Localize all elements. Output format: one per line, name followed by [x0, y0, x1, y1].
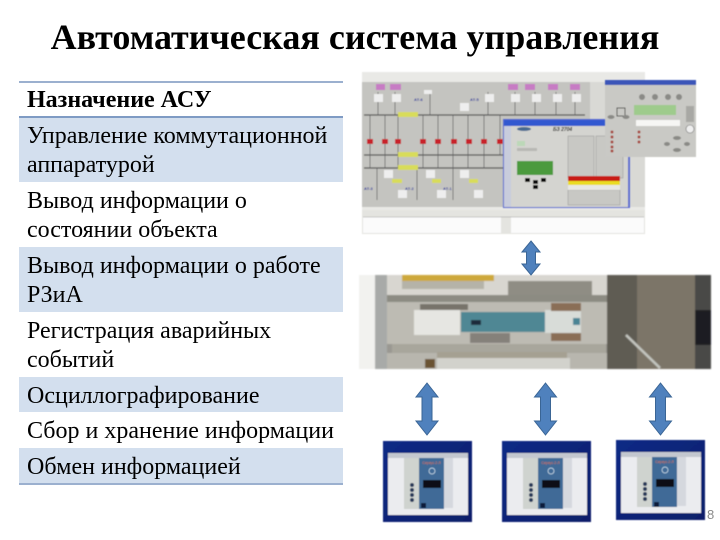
- row: data exchange: [19, 448, 343, 485]
- AT labels: [364, 97, 479, 191]
- yellow labels: [392, 112, 478, 183]
- panel: table of ASU purposes: [19, 81, 343, 485]
- table header: Назначение АСУ: [27, 87, 211, 113]
- AT labels: АТ-6: [414, 97, 423, 102]
- event log panes: [362, 210, 645, 234]
- row: event logging: событий: [27, 347, 114, 373]
- photo: relay cabinet: [359, 275, 711, 369]
- table header: [19, 81, 343, 118]
- photo: relay terminal 1: [383, 441, 472, 522]
- red breakers: [367, 139, 503, 144]
- row: event logging: [27, 318, 271, 373]
- dialog: BZ 2704 device window: БЗ 2704: [553, 127, 572, 133]
- pink feeder labels: [376, 84, 580, 90]
- row: switchgear control: аппаратурой: [27, 152, 155, 178]
- row: relay protection output: Вывод информации о работе: [27, 253, 321, 279]
- row: data storage: Сбор и хранение информации: [27, 418, 334, 444]
- dialog: control window: [605, 80, 696, 157]
- photo: relay terminal 2: [502, 441, 591, 522]
- top terminals: [402, 275, 494, 281]
- row: object state output: [27, 188, 247, 243]
- row: event logging: Регистрация аварийных: [27, 318, 271, 344]
- row: data exchange: Обмен информацией: [27, 454, 241, 480]
- photo: relay terminal 3: Сириус-2-Л: [655, 460, 674, 464]
- modules: [414, 310, 460, 335]
- row: relay protection output: РЗиА: [27, 282, 83, 308]
- photo: relay terminal 3: [616, 440, 705, 520]
- AT labels: АТ-3: [364, 186, 373, 191]
- row: oscillography: [19, 377, 343, 412]
- bottom terminals: [437, 352, 567, 358]
- photo: relay terminal 2: Сириус-2-Л: [541, 461, 560, 465]
- row: switchgear control: Управление коммутационной: [27, 123, 327, 149]
- screenshot: SCADA mnemonic diagram: [362, 72, 645, 234]
- row: switchgear control: [19, 118, 343, 182]
- arrow: screen to cabinet: [522, 241, 540, 275]
- row: relay protection output: [19, 247, 343, 312]
- title: Автоматическая система управления: [51, 17, 659, 57]
- shelves: [387, 295, 607, 302]
- page number: 8: [707, 507, 714, 522]
- row: object state output: состоянии объекта: [27, 217, 218, 243]
- row: object state output: Вывод информации о: [27, 188, 247, 214]
- dialog: BZ 2704 device window: [503, 119, 630, 208]
- row: oscillography: Осциллографирование: [27, 383, 260, 409]
- cable: [626, 335, 660, 368]
- photo: relay terminal 1: Сириус-2-Л: [422, 461, 441, 465]
- arrow: cabinet to relay 1: [416, 383, 438, 435]
- small white tags: [374, 90, 581, 198]
- AT labels: АТ-1: [443, 186, 452, 191]
- bus bars: [364, 115, 585, 168]
- AT labels: АТ-2: [405, 186, 414, 191]
- arrow: cabinet to relay 2: [534, 383, 556, 435]
- AT labels: АТ-5: [470, 97, 479, 102]
- arrow: cabinet to relay 3: [650, 383, 672, 435]
